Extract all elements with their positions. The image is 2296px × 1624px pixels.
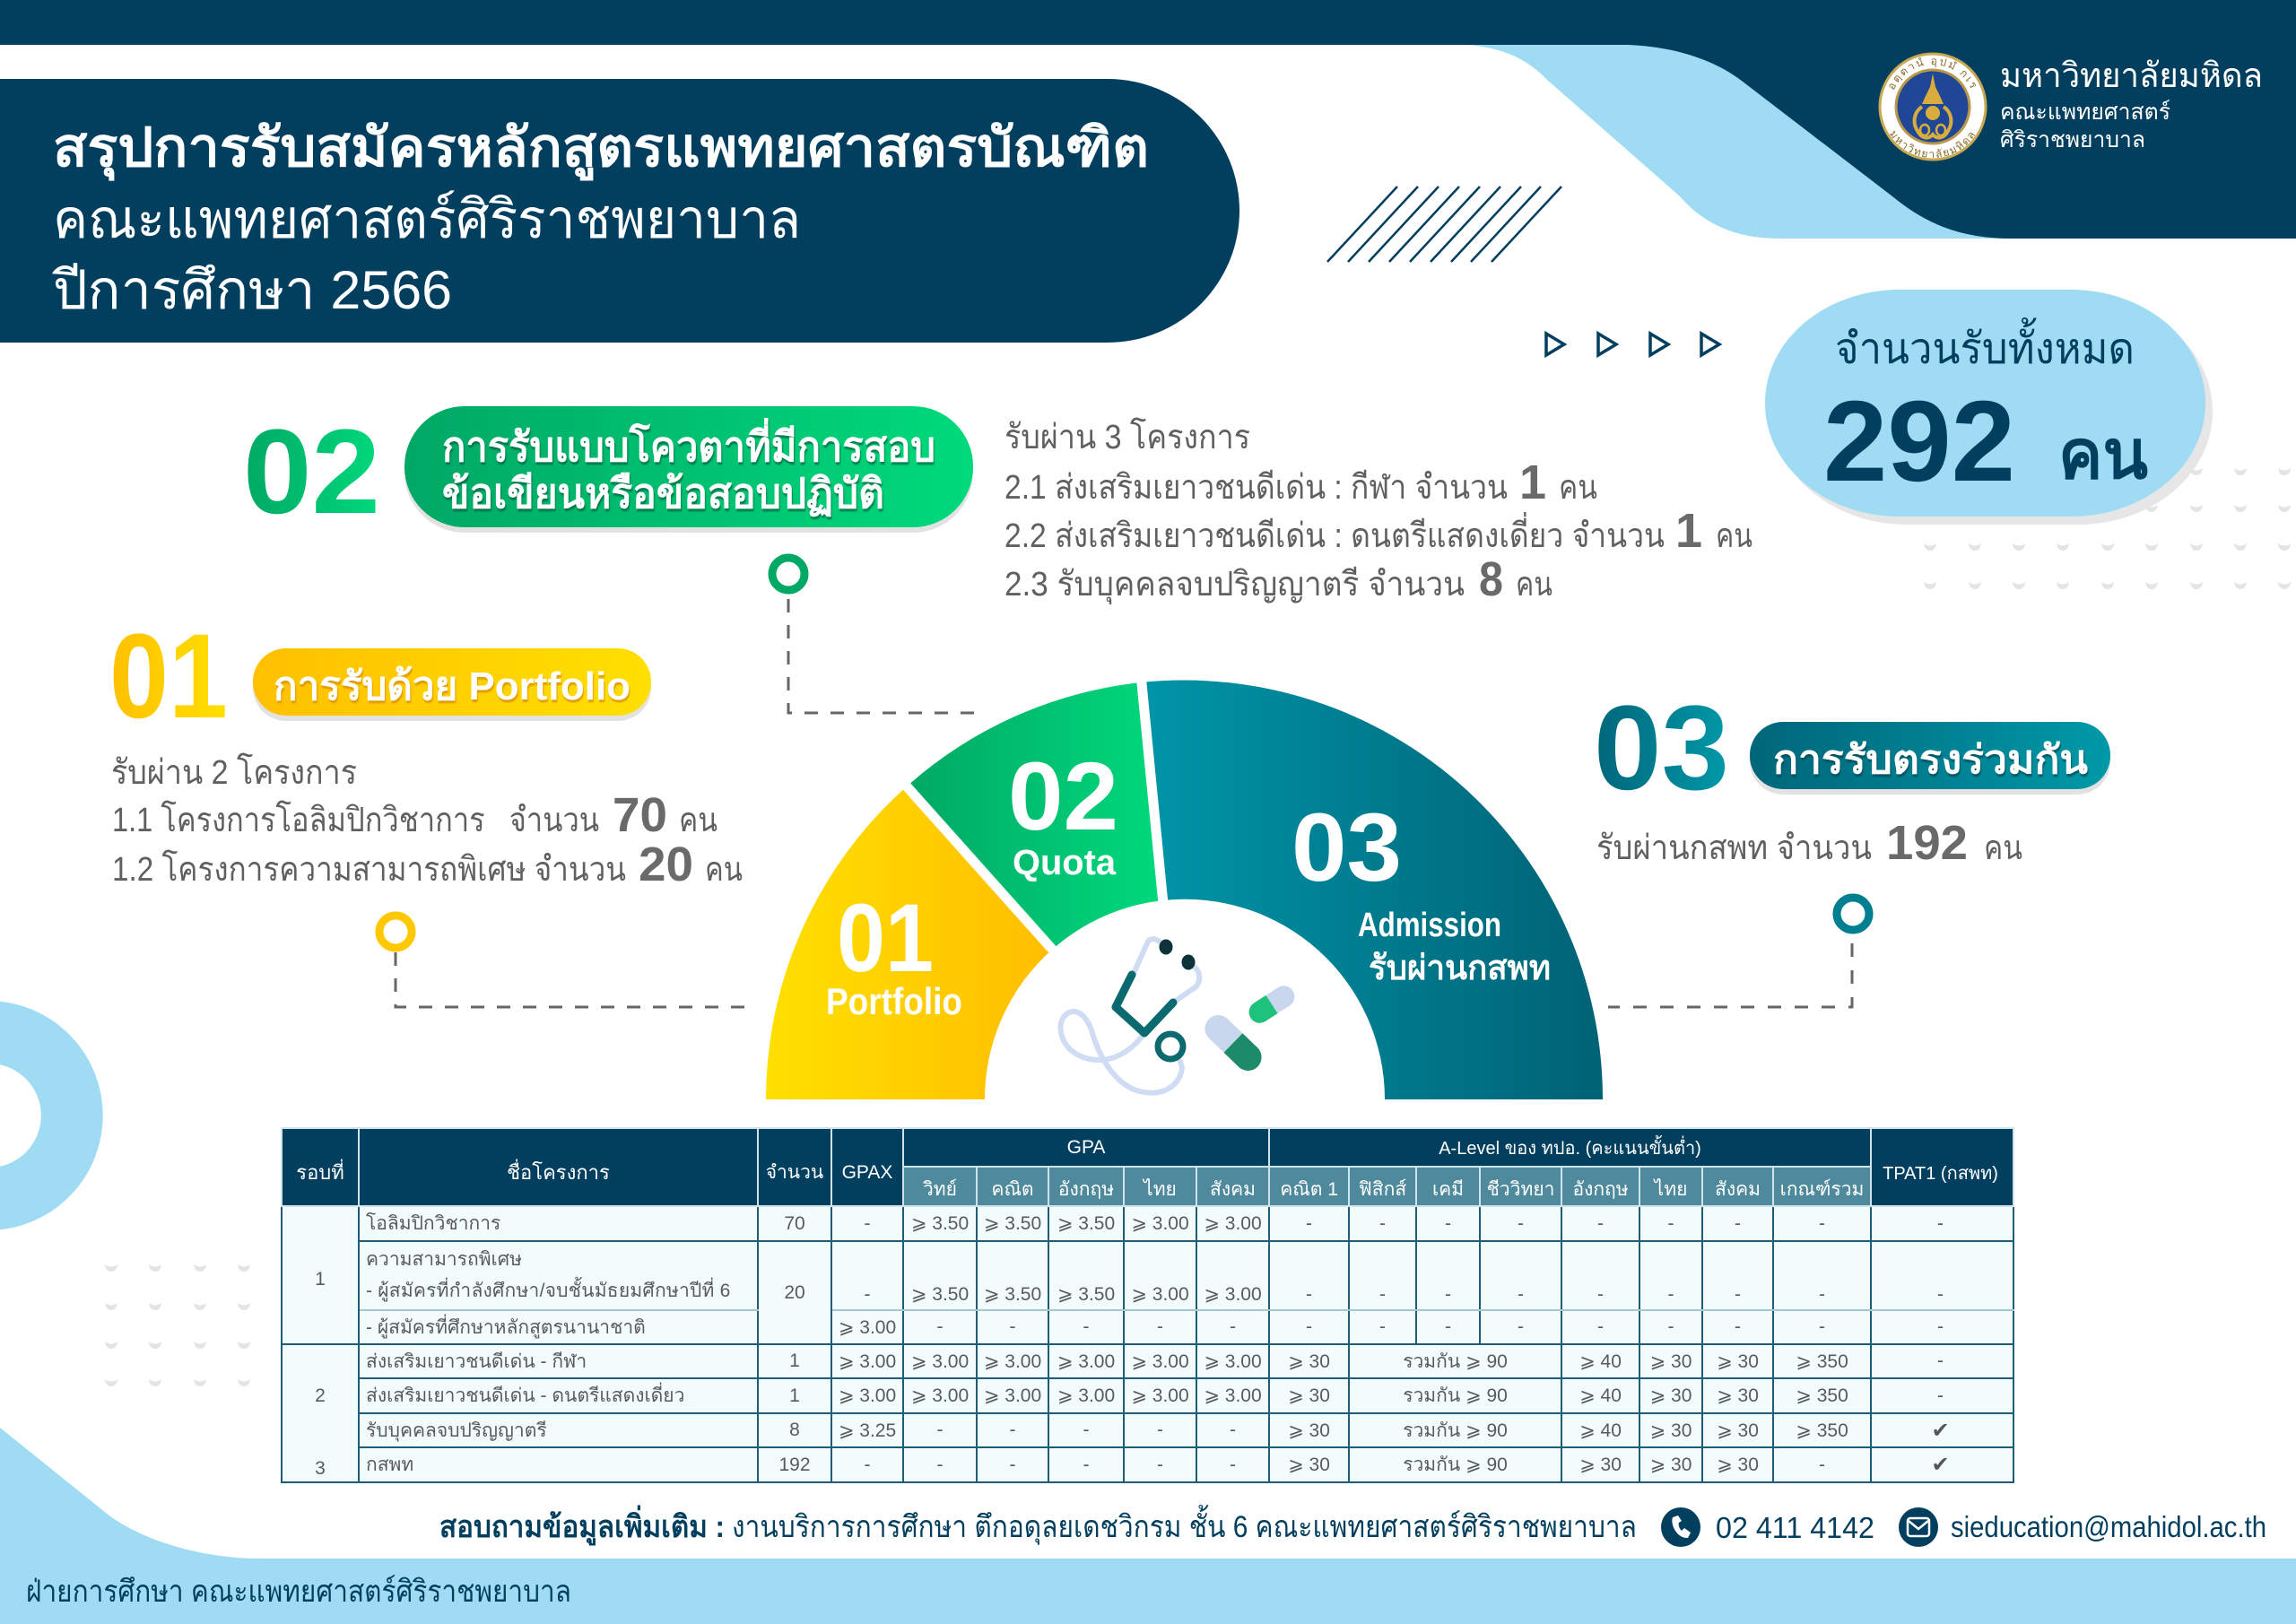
table: admission requirements: เกณฑ์รวม (1780, 1178, 1864, 1200)
section 01 details: 1.2 โครงการความสามารถพิเศษ จำนวน (112, 849, 626, 889)
section 02 details (1004, 417, 1752, 606)
table: admission requirements: - ผู้สมัครที่ศึกษาหลักสูตรนานาชาติ (366, 1316, 646, 1338)
table: admission requirements: ⩾ 30 (1288, 1350, 1330, 1372)
connector 02 (772, 558, 981, 713)
table: admission requirements: ส่งเสริมเยาวชนดีเด่น - ดนตรีแสดงเดี่ยว (366, 1385, 684, 1406)
table: admission requirements: - (936, 1316, 944, 1337)
table: admission requirements: - ผู้สมัครที่กำลังศึกษา/จบชั้นมัธยมศึกษาปีที่ 6 (366, 1281, 731, 1301)
table: admission requirements: - (1379, 1212, 1386, 1234)
label 01: 01 (837, 883, 934, 992)
contact text: สอบถามข้อมูลเพิ่มเติม : (439, 1505, 725, 1546)
table: admission requirements: รวมกัน ⩾ 90 (1403, 1455, 1508, 1475)
section 01 details (111, 752, 743, 891)
section 02 details: รับผ่าน 3 โครงการ (1004, 417, 1250, 456)
section 03 details: 192 (1886, 816, 1968, 870)
table: admission requirements: - (1379, 1284, 1386, 1305)
table: admission requirements: รอบที่ (296, 1161, 344, 1184)
table: admission requirements: - (865, 1284, 870, 1305)
table: admission requirements: ⩾ 3.00 (1204, 1350, 1262, 1372)
icon: email (1899, 1507, 1938, 1547)
table: admission requirements: ชื่อโครงการ (507, 1161, 610, 1184)
table: admission requirements: ⩾ 3.00 (911, 1385, 969, 1406)
table: admission requirements: ⩾ 3.50 (1057, 1213, 1115, 1234)
panel: total admissions (1765, 290, 2213, 525)
arrows: four triangles (1546, 334, 1719, 355)
section 01 heading: การรับด้วย Portfolio (274, 664, 631, 708)
table: admission requirements: - (1230, 1455, 1236, 1474)
table: admission requirements: ⩾ 3.50 (984, 1213, 1041, 1234)
section 01 details: คน (705, 851, 743, 889)
label 03: Admission (1358, 907, 1501, 944)
table: admission requirements: - (1597, 1316, 1604, 1337)
table: admission requirements: - (1518, 1212, 1524, 1234)
table: admission requirements: เคมี (1432, 1178, 1464, 1200)
table: admission requirements: - (1518, 1316, 1524, 1337)
table: admission requirements: ⩾ 3.00 (1131, 1385, 1189, 1406)
table: admission requirements: 1 (789, 1350, 800, 1371)
table: admission requirements: - (1157, 1455, 1163, 1474)
title text (52, 117, 1149, 320)
table: admission requirements: - (936, 1455, 944, 1474)
table: admission requirements: ⩾ 30 (1650, 1385, 1692, 1406)
section 02 details: คน (1716, 517, 1752, 555)
table: admission requirements: - (1445, 1316, 1451, 1337)
dark header shape (1627, 45, 2296, 239)
table: admission requirements: - (1157, 1316, 1163, 1337)
table: admission requirements: 20 (784, 1282, 805, 1302)
university name: มหาวิทยาลัยมหิดล (2000, 57, 2263, 95)
icon: green and white capsule (1245, 982, 1299, 1027)
table: admission requirements: A-Level ของ ทปอ. (คะแนนขั้นต่ำ) (1439, 1139, 1701, 1159)
table: admission requirements: คณิต (991, 1178, 1034, 1200)
decorative dots top right (1924, 468, 2291, 589)
logo: Mahidol University: มหาวิทยาลัยมหิดล (1890, 131, 1975, 158)
table: admission requirements: ไทย (1144, 1178, 1177, 1200)
section 02 details: 2.3 รับบุคคลจบปริญญาตรี จำนวน (1004, 566, 1465, 604)
label 02: Quota (1013, 843, 1117, 882)
table: admission requirements: ⩾ 30 (1717, 1350, 1759, 1372)
table: admission requirements: คณิต 1 (1280, 1178, 1338, 1200)
university name: ศิริราชพยาบาล (2000, 127, 2145, 152)
table: admission requirements: ⩾ 30 (1288, 1385, 1330, 1406)
table: admission requirements: - (1083, 1420, 1089, 1440)
table: admission requirements: 2 (315, 1385, 326, 1406)
diagonal stripes (1327, 187, 1561, 262)
table: admission requirements: - (1668, 1284, 1674, 1305)
section 02 heading: การรับแบบโควตาที่มีการสอบ (442, 418, 935, 470)
top bar (0, 0, 2296, 45)
table: admission requirements (281, 1127, 2014, 1483)
light blue swoosh (1468, 45, 2063, 239)
table: admission requirements: ⩾ 3.00 (984, 1385, 1041, 1406)
section 02 details: 1 (1519, 456, 1546, 509)
table: admission requirements: - (1597, 1212, 1604, 1234)
table: admission requirements: ⩾ 3.00 (839, 1316, 896, 1338)
section 03 heading (1594, 682, 2110, 815)
section 01 details: 1.1 โครงการโอลิมปิกวิชาการ จำนวน (112, 800, 599, 839)
panel: total admissions: คน (2058, 417, 2148, 493)
section 02 details: 2.1 ส่งเสริมเยาวชนดีเด่น : กีฬา จำนวน (1004, 469, 1508, 507)
table: admission requirements: - (1819, 1316, 1825, 1337)
table: admission requirements: - (1937, 1316, 1944, 1337)
table: admission requirements: ⩾ 350 (1796, 1385, 1848, 1406)
table: admission requirements: ⩾ 3.50 (1057, 1284, 1115, 1305)
table: admission requirements: - (1937, 1212, 1944, 1234)
table: admission requirements: ⩾ 350 (1796, 1350, 1848, 1372)
university name (2000, 57, 2263, 152)
table: admission requirements: รับบุคคลจบปริญญาตรี (366, 1420, 547, 1440)
label 02: 02 (1008, 742, 1118, 850)
left ring decoration (0, 1002, 103, 1229)
label 03: 03 (1292, 793, 1402, 901)
icon: stethoscope (1061, 939, 1199, 1093)
table: admission requirements: ⩾ 350 (1796, 1420, 1848, 1440)
table: admission requirements: กสพท (366, 1455, 413, 1475)
table: admission requirements: - (1597, 1284, 1604, 1305)
table: admission requirements: ⩾ 3.00 (839, 1385, 896, 1406)
icon: dark green capsule (1199, 1010, 1267, 1076)
table: admission requirements: - (1010, 1455, 1015, 1474)
table: admission requirements: - (1819, 1284, 1825, 1305)
table: admission requirements: - (936, 1420, 944, 1440)
title text: คณะแพทยศาสตร์ศิริราชพยาบาล (53, 189, 801, 249)
table: admission requirements: - (1819, 1455, 1825, 1474)
table: admission requirements: TPAT1 (กสพท) (1883, 1164, 1998, 1184)
connector 01 (379, 916, 750, 1007)
table: admission requirements: ⩾ 40 (1579, 1350, 1622, 1372)
segment 03 (1141, 681, 1603, 1099)
table: admission requirements: - (1445, 1212, 1451, 1234)
table: admission requirements: - (1083, 1455, 1089, 1474)
table: admission requirements: - (1379, 1316, 1386, 1337)
section 01 details: คน (679, 802, 718, 839)
section 01 heading: 01 (109, 610, 228, 743)
table: admission requirements: - (1306, 1316, 1312, 1337)
table: admission requirements: ⩾ 3.00 (911, 1350, 969, 1372)
table: admission requirements: - (1937, 1385, 1944, 1406)
table: admission requirements: - (1010, 1420, 1015, 1440)
table: admission requirements: - (1445, 1284, 1451, 1305)
table: admission requirements: - (1819, 1212, 1825, 1234)
table: admission requirements: ⩾ 3.00 (1057, 1385, 1115, 1406)
table: admission requirements: รวมกัน ⩾ 90 (1403, 1420, 1508, 1440)
table: admission requirements: ⩾ 30 (1288, 1420, 1330, 1440)
table: admission requirements: ⩾ 3.00 (839, 1350, 896, 1372)
section 02 details: 2.2 ส่งเสริมเยาวชนดีเด่น : ดนตรีแสดงเดี่ยว จำนวน (1004, 512, 1665, 555)
table: admission requirements: ⩾ 40 (1579, 1385, 1622, 1406)
table: admission requirements: 8 (789, 1420, 800, 1440)
footer swoosh and band (0, 1428, 2296, 1624)
title panel (0, 79, 1239, 343)
section 02 heading: ข้อเขียนหรือข้อสอบปฏิบัติ (442, 470, 884, 517)
section 03 details: คน (1984, 829, 2022, 867)
section 01 heading (109, 610, 651, 743)
table: admission requirements: ✔ (1931, 1419, 1950, 1442)
section 03 details: รับผ่านกสพท จำนวน (1596, 829, 1872, 867)
decorative dots left (105, 1264, 250, 1386)
section 02 details: คน (1559, 469, 1597, 507)
table: admission requirements: - (1937, 1284, 1944, 1305)
table: admission requirements: ⩾ 30 (1288, 1455, 1330, 1475)
university name: คณะแพทยศาสตร์ (2000, 100, 2170, 125)
table: admission requirements: - (1735, 1316, 1741, 1337)
section 02 heading: 02 (243, 405, 380, 539)
table: admission requirements: ⩾ 3.50 (984, 1284, 1041, 1305)
footer organisation text: ฝ่ายการศึกษา คณะแพทยศาสตร์ศิริราชพยาบาล (26, 1575, 571, 1609)
label 03: รับผ่านกสพท (1369, 950, 1551, 987)
table: admission requirements: - (1230, 1316, 1236, 1337)
table: admission requirements: 3 (315, 1458, 326, 1479)
label 01: Portfolio (826, 980, 962, 1022)
contact text (439, 1505, 1637, 1546)
table: admission requirements: ⩾ 3.00 (1204, 1284, 1262, 1305)
table: admission requirements: - (1518, 1284, 1524, 1305)
section 01 details: รับผ่าน 2 โครงการ (111, 752, 357, 792)
panel: total admissions: 292 (1823, 378, 2015, 506)
table: admission requirements: ⩾ 30 (1579, 1455, 1622, 1475)
table: admission requirements: - (1668, 1212, 1674, 1234)
section 01 details: 70 (613, 788, 667, 842)
section 02 details: 1 (1675, 504, 1702, 558)
table: admission requirements: - (1083, 1316, 1089, 1337)
table: admission requirements: GPA (1067, 1137, 1105, 1157)
table: admission requirements: ฟิสิกส์ (1359, 1178, 1406, 1200)
segment 02 (907, 682, 1163, 950)
table: admission requirements: ⩾ 3.00 (1204, 1213, 1262, 1234)
table: admission requirements: ชีววิทยา (1487, 1178, 1554, 1200)
table: admission requirements: ⩾ 30 (1650, 1420, 1692, 1440)
email address: sieducation@mahidol.ac.th (1951, 1510, 2266, 1543)
title text: สรุปการรับสมัครหลักสูตรแพทยศาสตรบัณฑิต (53, 117, 1149, 181)
table: admission requirements: - (1010, 1316, 1015, 1337)
table: admission requirements: ⩾ 40 (1579, 1420, 1622, 1440)
table: admission requirements: - (865, 1212, 870, 1234)
table: admission requirements: สังคม (1210, 1178, 1256, 1200)
table: admission requirements: ⩾ 30 (1650, 1350, 1692, 1372)
connector 03 (1608, 898, 1869, 1007)
table: admission requirements: ⩾ 3.50 (911, 1213, 969, 1234)
section 02 details: 8 (1479, 552, 1503, 606)
section 03 details (1596, 816, 2022, 870)
label 03 (1292, 793, 1551, 987)
segment 01 (766, 786, 1052, 1099)
table: admission requirements: ⩾ 3.00 (1204, 1385, 1262, 1406)
table: admission requirements: อังกฤษ (1572, 1178, 1629, 1200)
table: admission requirements: - (1306, 1284, 1312, 1305)
table: admission requirements: ส่งเสริมเยาวชนดีเด่น - กีฬา (366, 1350, 587, 1372)
label 01 (826, 883, 962, 1022)
table: admission requirements: 70 (784, 1212, 805, 1234)
section 02 heading (243, 405, 973, 539)
table: admission requirements: - (1937, 1350, 1944, 1371)
table: admission requirements: ⩾ 3.00 (1131, 1350, 1189, 1372)
table: admission requirements: GPAX (842, 1162, 892, 1182)
table: admission requirements: ⩾ 30 (1717, 1455, 1759, 1475)
table: admission requirements: โอลิมปิกวิชาการ (366, 1213, 500, 1234)
table: admission requirements: ⩾ 3.50 (911, 1284, 969, 1305)
table: admission requirements: - (1306, 1212, 1312, 1234)
section 03 heading: 03 (1594, 682, 1729, 815)
table: admission requirements: ⩾ 3.00 (1131, 1284, 1189, 1305)
section 01 details: 20 (639, 838, 693, 891)
table: admission requirements: ⩾ 30 (1717, 1420, 1759, 1440)
table: admission requirements: จำนวน (766, 1162, 823, 1183)
table: admission requirements: - (1230, 1420, 1236, 1440)
table: admission requirements: - (1735, 1284, 1741, 1305)
contact text: งานบริการการศึกษา ตึกอดุลยเดชวิกรม ชั้น 6 คณะแพทยศาสตร์ศิริราชพยาบาล (732, 1505, 1637, 1545)
table: admission requirements: - (1735, 1212, 1741, 1234)
table: admission requirements: ✔ (1931, 1453, 1950, 1477)
table: admission requirements: ⩾ 30 (1650, 1455, 1692, 1475)
table: admission requirements: - (1157, 1420, 1163, 1440)
table: admission requirements: - (1668, 1316, 1674, 1337)
table: admission requirements: รวมกัน ⩾ 90 (1403, 1385, 1508, 1406)
table: admission requirements: - (865, 1455, 870, 1474)
phone number: 02 411 4142 (1716, 1511, 1874, 1544)
logo: Mahidol University: อตฺตานํ อุปมํ กเร (1889, 57, 1977, 90)
table: admission requirements: ⩾ 3.25 (839, 1420, 896, 1440)
section 02 details: คน (1516, 566, 1552, 604)
table: admission requirements: ความสามารถพิเศษ (366, 1249, 522, 1270)
table: admission requirements: ⩾ 3.00 (1057, 1350, 1115, 1372)
panel: total admissions: จำนวนรับทั้งหมด (1835, 317, 2135, 373)
table: admission requirements: ⩾ 3.00 (984, 1350, 1041, 1372)
table: admission requirements: 192 (778, 1455, 811, 1474)
chart: semicircle admission shares (766, 674, 1603, 1099)
table: admission requirements: วิทย์ (923, 1178, 957, 1200)
table: admission requirements: ⩾ 3.00 (1131, 1213, 1189, 1234)
table: admission requirements: สังคม (1715, 1178, 1761, 1200)
table: admission requirements: ⩾ 30 (1717, 1385, 1759, 1406)
table: admission requirements: 1 (315, 1269, 326, 1290)
section 03 heading: การรับตรงร่วมกัน (1773, 738, 2088, 782)
title text: ปีการศึกษา 2566 (52, 260, 452, 320)
table: admission requirements: ไทย (1655, 1178, 1687, 1200)
table: admission requirements: อังกฤษ (1058, 1178, 1114, 1200)
table: admission requirements: 1 (789, 1385, 800, 1406)
logo: Mahidol University (1878, 52, 1987, 161)
table: admission requirements: รวมกัน ⩾ 90 (1403, 1350, 1508, 1372)
icon: phone (1661, 1507, 1700, 1547)
